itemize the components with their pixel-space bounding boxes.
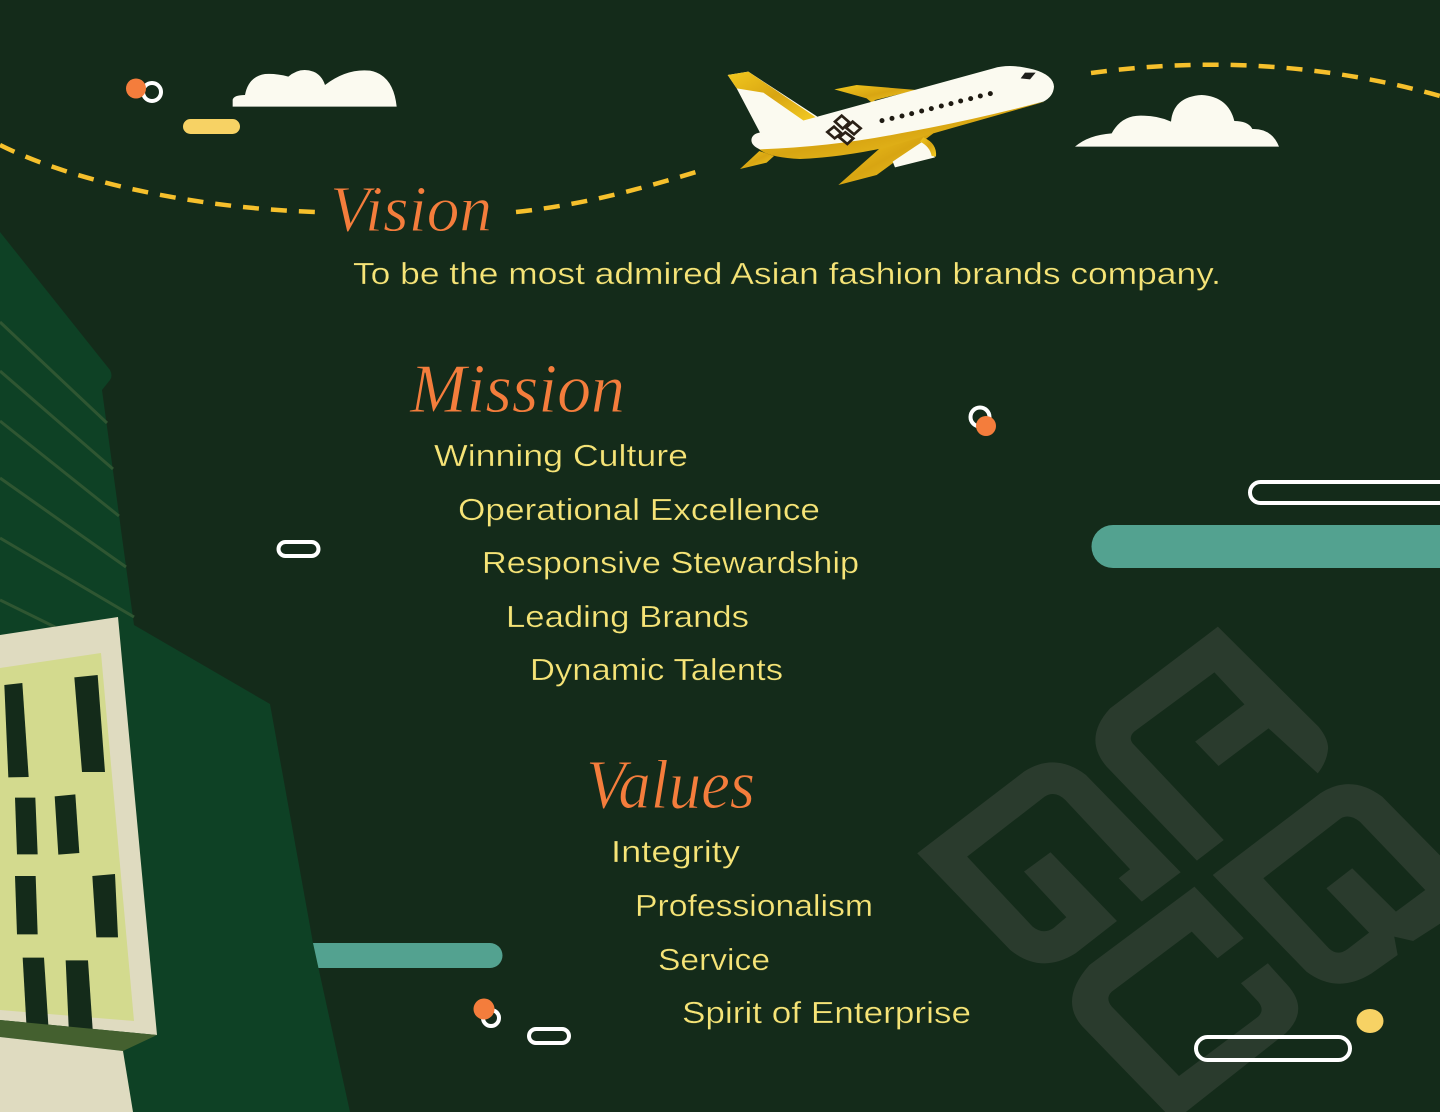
heading: Mission: Mission bbox=[409, 351, 625, 428]
mission item 2: Operational Excellence bbox=[458, 492, 820, 527]
heading: Vision: Vision bbox=[330, 173, 492, 246]
value item 2: Professionalism bbox=[635, 888, 873, 923]
building side bbox=[0, 232, 350, 1112]
mission item 1: Winning Culture bbox=[434, 438, 688, 473]
value item 1: Integrity bbox=[611, 834, 741, 869]
mission item 4: Leading Brands bbox=[506, 599, 749, 634]
teal bar right bbox=[1092, 525, 1440, 568]
logo top letter bbox=[1095, 627, 1328, 861]
white pill left bbox=[278, 542, 318, 556]
yellow pill bbox=[183, 119, 240, 134]
tail fin gold band bbox=[728, 72, 817, 122]
building windows bbox=[4, 675, 118, 1029]
airplane bbox=[728, 66, 1054, 185]
building bbox=[0, 232, 350, 1112]
mission list bbox=[434, 438, 859, 687]
tail logo bbox=[827, 116, 861, 144]
engine pylon bbox=[920, 137, 936, 157]
rear stabiliser bbox=[740, 151, 774, 169]
value item 3: Service bbox=[658, 942, 770, 977]
logo right letter bbox=[1213, 784, 1440, 984]
heading: Values: Values bbox=[586, 747, 755, 824]
building panel bbox=[0, 653, 134, 1021]
cloud right bbox=[1075, 95, 1279, 147]
flight path left bbox=[0, 145, 316, 212]
lower wing flap bbox=[893, 141, 935, 167]
mission item 3: Responsive Stewardship bbox=[482, 545, 859, 580]
cloud left bbox=[233, 70, 397, 107]
teal bar left bbox=[300, 943, 502, 968]
building awning bbox=[0, 1020, 157, 1051]
white pill right bbox=[1250, 482, 1440, 503]
values list bbox=[611, 834, 971, 1030]
dot pair centre right bbox=[970, 408, 996, 436]
cabin windows bbox=[879, 91, 993, 123]
cockpit window bbox=[1021, 73, 1036, 79]
white pill bottom right bbox=[1196, 1037, 1350, 1060]
mission item 5: Dynamic Talents bbox=[530, 652, 783, 687]
building front bbox=[0, 617, 157, 1035]
fuselage belly bbox=[758, 102, 1045, 159]
vision statement: To be the most admired Asian fashion brands company. bbox=[353, 256, 1221, 291]
flight path right bbox=[1091, 65, 1440, 96]
fuselage bbox=[751, 66, 1054, 149]
white pill bottom bbox=[529, 1029, 569, 1043]
dot pair top left bbox=[126, 78, 161, 101]
logo left letter bbox=[917, 762, 1181, 963]
watermark logo bbox=[917, 627, 1440, 1112]
building base bbox=[0, 1037, 133, 1112]
flight path centre bbox=[516, 169, 706, 212]
logo bottom letter bbox=[1072, 887, 1298, 1112]
lower wing bbox=[838, 133, 933, 185]
dot pair bottom bbox=[474, 998, 499, 1026]
building ledge lines bbox=[0, 322, 134, 627]
tail fin bbox=[728, 72, 817, 133]
yellow dot bbox=[1356, 1009, 1384, 1033]
upper wing bbox=[834, 85, 917, 103]
value item 4: Spirit of Enterprise bbox=[682, 995, 971, 1030]
